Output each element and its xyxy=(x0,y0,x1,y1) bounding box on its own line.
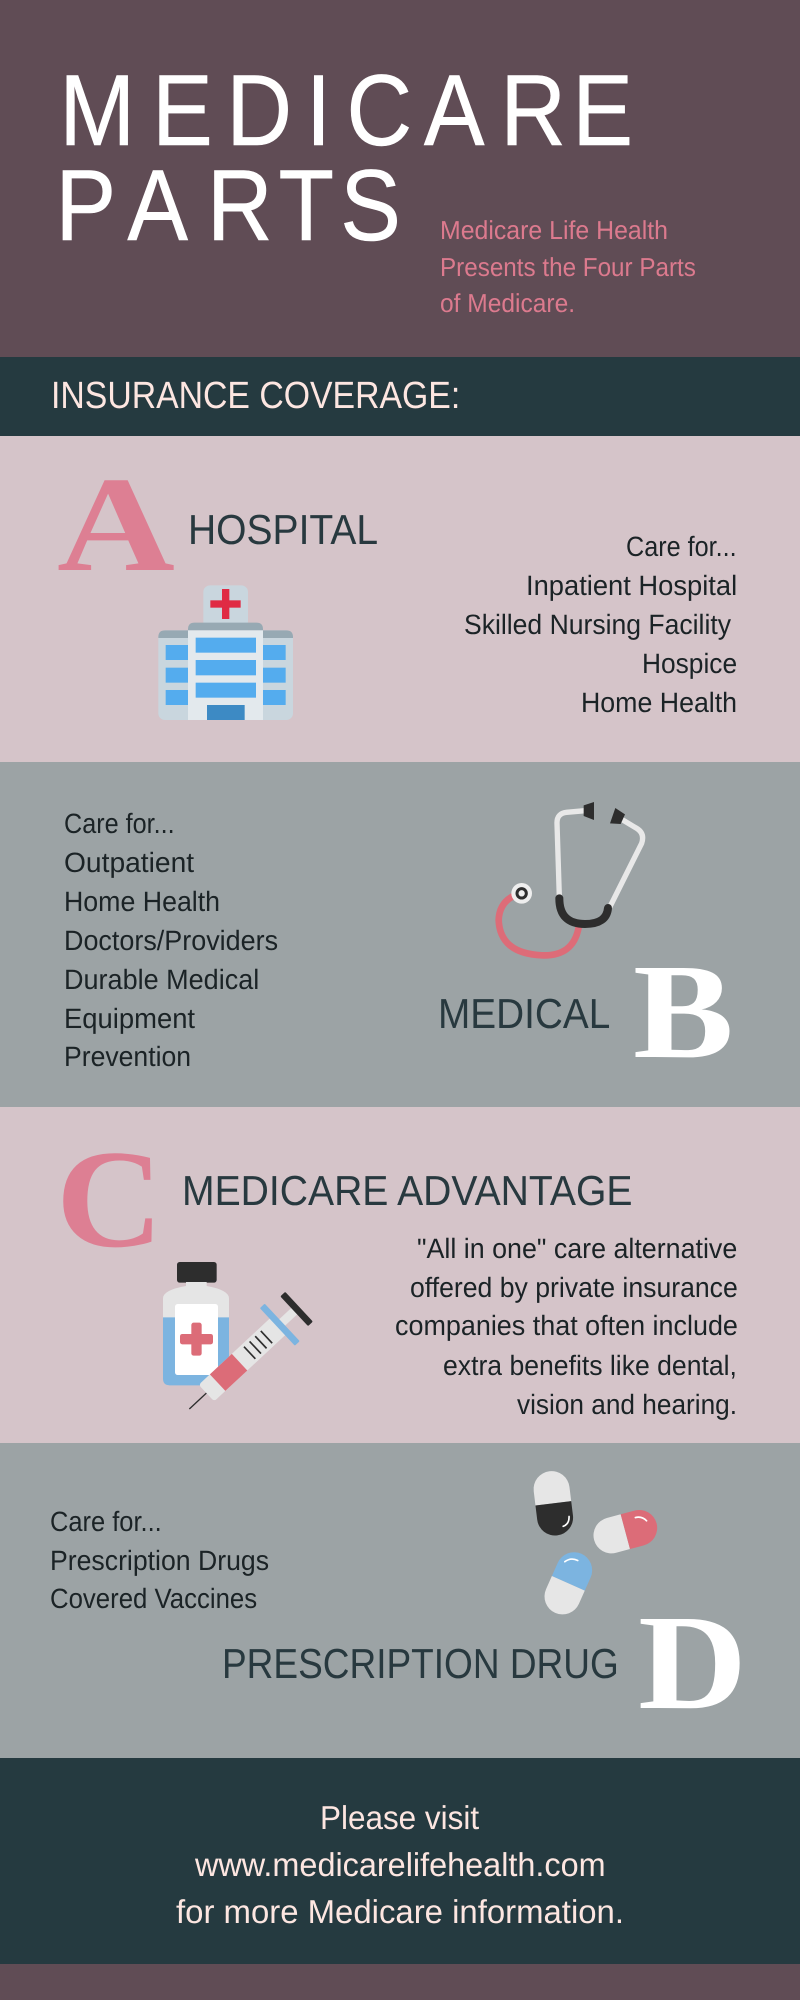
subtitle: Medicare Life Health xyxy=(440,215,668,245)
care list: part A: Hospice xyxy=(642,648,737,679)
subtitle: Presents the Four Parts xyxy=(440,252,696,282)
care list: part A: Skilled Nursing Facility xyxy=(464,609,731,640)
care list: part D: Covered Vaccines xyxy=(50,1583,257,1614)
heading: medicare advantage: MEDICARE ADVANTAGE xyxy=(182,1167,632,1214)
care list: part A: Inpatient Hospital xyxy=(526,570,737,601)
panel: part D prescription drug xyxy=(0,1443,800,1758)
icon: hospital xyxy=(158,585,293,720)
footer text: Please visit xyxy=(320,1799,479,1836)
panel: footer call to action xyxy=(0,1758,800,1964)
description: part C: companies that often include xyxy=(395,1310,738,1341)
care list: part D: Prescription Drugs xyxy=(50,1545,269,1576)
care list: part A: Home Health xyxy=(581,687,737,718)
description: part C: vision and hearing. xyxy=(517,1389,737,1420)
care list: part B: Equipment xyxy=(64,1003,195,1034)
description: part C xyxy=(395,1233,738,1420)
care list: part B: Durable Medical xyxy=(64,964,259,995)
heading: medical: MEDICAL xyxy=(438,990,610,1037)
letter D: D xyxy=(638,1588,747,1738)
footer text: www.medicarelifehealth.com xyxy=(194,1846,606,1883)
letter A: A xyxy=(57,450,175,600)
care list: part B: Doctors/Providers xyxy=(64,925,278,956)
letter B: B xyxy=(633,937,734,1087)
care list: part B: Home Health xyxy=(64,886,220,917)
panel: part C medicare advantage xyxy=(0,1107,800,1443)
heading: hospital: HOSPITAL xyxy=(188,506,378,553)
care list: part A: Care for... xyxy=(626,531,737,562)
care list: part B: Care for... xyxy=(64,808,175,839)
heading: insurance coverage: INSURANCE COVERAGE: xyxy=(51,375,460,417)
subtitle: of Medicare. xyxy=(440,288,575,318)
title xyxy=(56,55,633,262)
description: part C: extra benefits like dental, xyxy=(443,1350,737,1381)
panel: part A hospital xyxy=(0,436,800,762)
care list: part D xyxy=(50,1506,269,1614)
footer text xyxy=(176,1799,624,1930)
care list: part B: Prevention xyxy=(64,1041,191,1072)
panel: part B medical xyxy=(0,762,800,1107)
footer text: for more Medicare information. xyxy=(176,1893,624,1930)
care list: part B xyxy=(64,808,278,1072)
bottom band xyxy=(0,1964,800,2000)
heading: prescription drug: PRESCRIPTION DRUG xyxy=(222,1640,619,1687)
panel: insurance coverage band xyxy=(0,357,800,436)
icon: pills xyxy=(532,1469,661,1620)
care list: part A xyxy=(464,531,737,718)
icon: stethoscope xyxy=(499,802,643,955)
icon: vial and syringe xyxy=(163,1262,317,1428)
title: PARTS xyxy=(56,150,401,262)
letter C: C xyxy=(56,1122,163,1277)
title: MEDICARE xyxy=(59,55,633,167)
care list: part B: Outpatient xyxy=(64,847,194,878)
care list: part D: Care for... xyxy=(50,1506,162,1537)
panel: header xyxy=(0,0,800,357)
description: part C: offered by private insurance xyxy=(410,1272,738,1303)
description: part C: "All in one" care alternative xyxy=(417,1233,737,1264)
subtitle xyxy=(440,215,696,318)
